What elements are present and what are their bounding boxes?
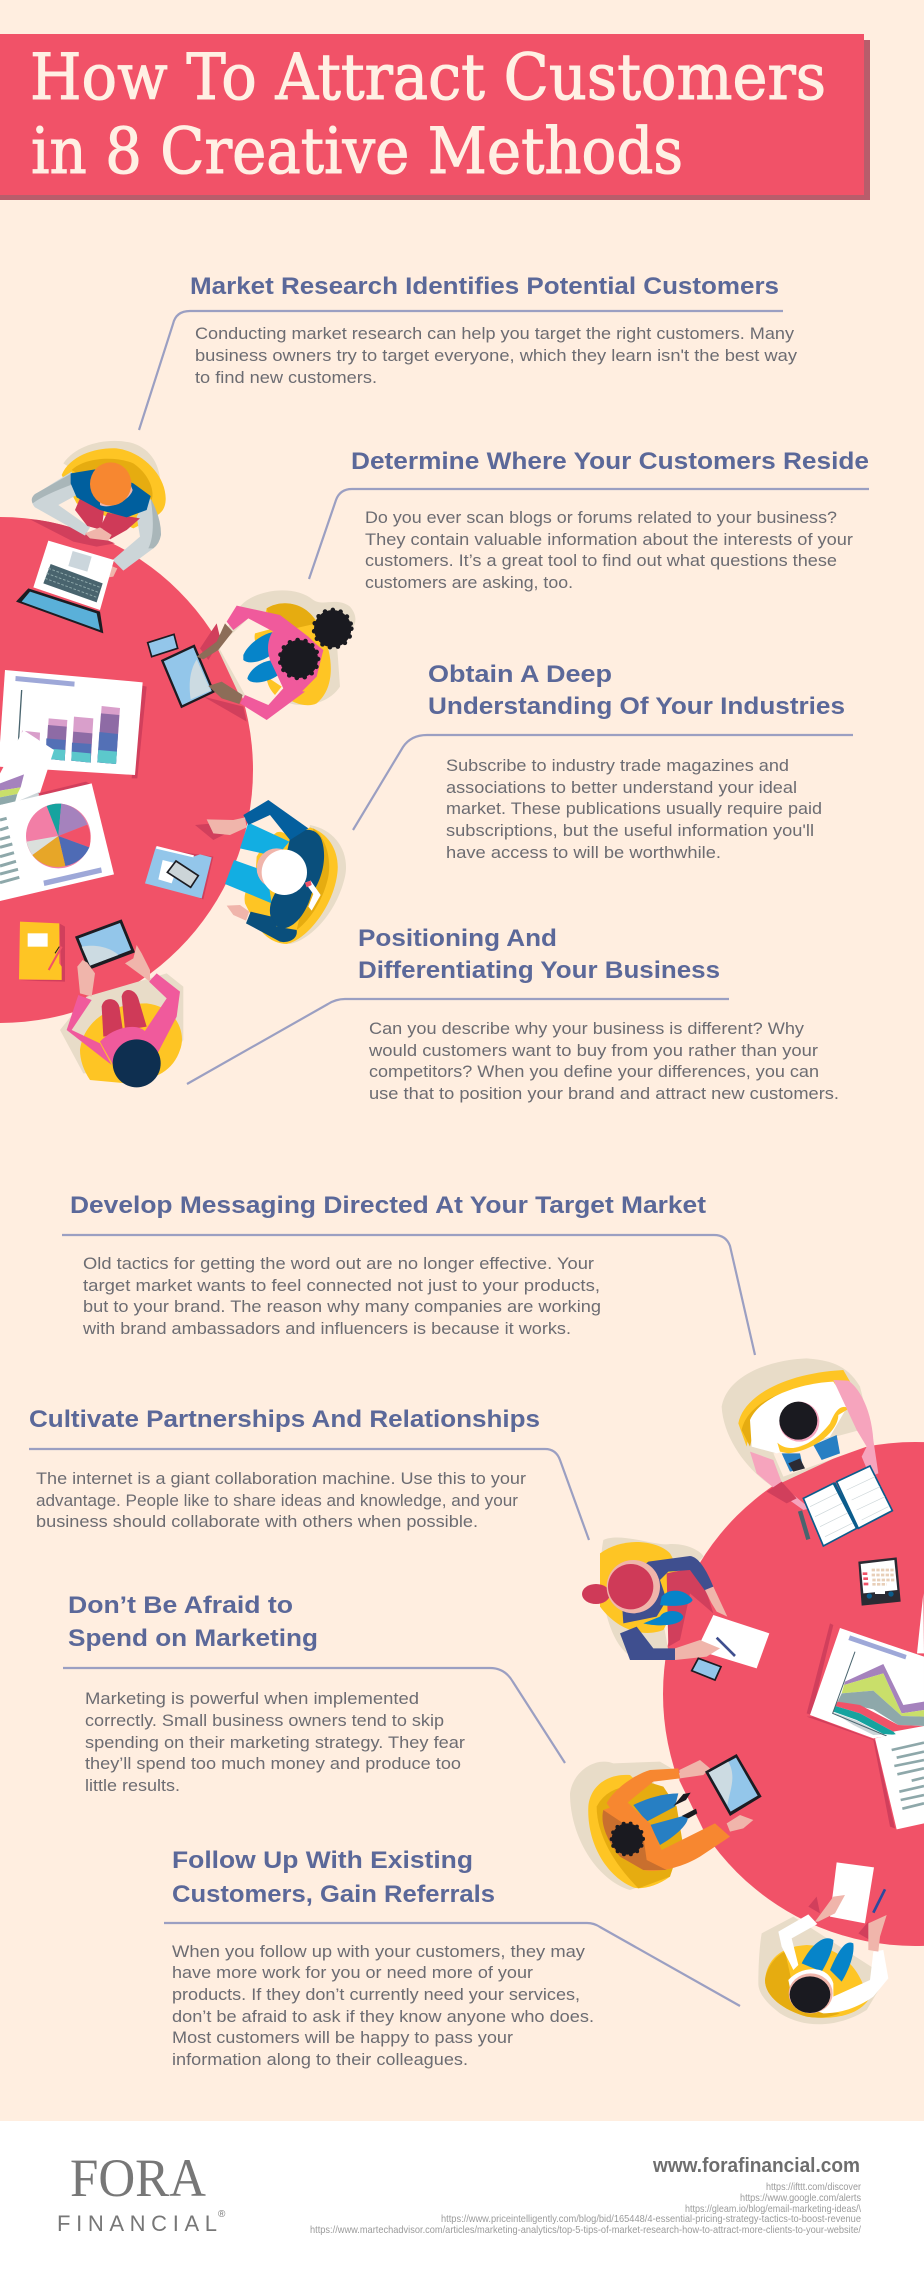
pie chart [26,804,91,868]
body text: would customers want to buy from you rather than your [368,1041,818,1060]
heading: Customers, Gain Referrals [172,1881,495,1908]
heading: Don’t Be Afraid to [68,1592,293,1619]
source links: https://www.priceintelligently.com/blog/bid/165448/4-essential-pricing-strategy-tactics-to-boost-revenue [441,2213,861,2225]
connector line [29,1449,589,1540]
table shadows [30,519,115,547]
body text: have more work for you or need more of your [172,1963,533,1982]
section 5: messaging [62,1192,755,1355]
right table illustration [570,1358,924,2024]
person at laptop [32,441,166,579]
source links: https://gleam.io/blog/email-marketing-ideas/\ [685,2203,861,2215]
body text: Old tactics for getting the word out are no longer effective. Your [83,1254,594,1273]
website: www.forafinancial.com [652,2155,860,2177]
person in white shirt [758,1895,888,2024]
body text: Do you ever scan blogs or forums related to your business? [365,508,837,527]
section 3: industries [353,661,853,862]
body text: business owners try to target everyone, which they learn isn't the best way [195,346,798,365]
left table illustration [0,441,355,1087]
body text: spending on their marketing strategy. They fear [85,1733,465,1752]
connector line [309,489,869,579]
section 1: market research [139,273,798,430]
body text: products. If they don’t currently need your services, [172,1985,580,2004]
calendar [858,1557,901,1606]
source links: https://ifttt.com/discover [766,2181,861,2193]
upper right people group [582,1358,901,1668]
lower right people group [570,1593,924,2024]
body text: customers. It’s a great tool to find out what questions these [365,551,837,570]
body text [85,1689,465,1795]
heading: Determine Where Your Customers Reside [351,448,869,475]
person in white with pink sleeves [722,1358,878,1510]
logo: FINANCIAL [57,2211,217,2236]
connector line [63,1668,565,1763]
logo [57,2148,226,2236]
body text: Can you describe why your business is different? Why [369,1019,805,1038]
body text [365,508,853,592]
pie chart sheet [0,782,114,901]
source links [310,2181,861,2236]
stacked area chart [833,1652,924,1736]
tablet [705,1754,762,1816]
connector line [62,1235,755,1355]
stacked area sheet [0,730,54,807]
section 8: follow up [164,1847,740,2069]
phone [692,1658,721,1680]
section 7: marketing spend [63,1592,565,1795]
person in pink with tablet [197,590,355,720]
bar chart sheet [0,670,147,778]
yellow notebook with pen [19,922,65,982]
body text: to find new customers. [195,368,377,387]
heading: Cultivate Partnerships And Relationships [29,1406,540,1433]
body text: target market wants to feel connected not just to your products, [83,1276,600,1295]
body text [82,1254,601,1338]
body text: The internet is a giant collaboration machine. Use this to your [36,1469,526,1488]
body text: have access to will be worthwhile. [446,843,721,862]
body text: Subscribe to industry trade magazines and [446,756,789,775]
body text: with brand ambassadors and influencers is because it works. [82,1319,571,1338]
body text: use that to position your brand and attract new customers. [369,1084,839,1103]
body text [172,1942,594,2069]
heading: Obtain A Deep [428,661,612,688]
body text: market. These publications usually require paid [446,799,822,818]
title banner: in 8 Creative Methods [31,115,683,189]
paper with pen [675,1615,769,1668]
heading: Positioning And [358,925,557,952]
heading: Differentiating Your Business [358,957,720,984]
connector line [353,735,853,830]
heading: Spend on Marketing [68,1625,318,1652]
open notebook [803,1466,892,1546]
lower left people group [0,730,346,1087]
body text: advantage. People like to share ideas and knowledge, and your [36,1491,518,1510]
body text [446,756,822,862]
body text: subscriptions, but the useful information you'll [446,821,814,840]
heading: Follow Up With Existing [172,1847,473,1874]
folder with phone [145,846,213,899]
heading: Market Research Identifies Potential Customers [190,273,779,300]
body text: information along to their colleagues. [172,2050,468,2069]
connector line [187,999,729,1084]
area chart sheet [807,1593,924,1828]
heading: Understanding Of Your Industries [428,693,845,720]
logo: FORA [70,2148,206,2208]
laptop [16,541,114,633]
person in pink with glasses [60,945,183,1087]
text document [875,1728,924,1829]
body text: business should collaborate with others when possible. [36,1512,478,1531]
connector line [139,311,783,430]
person in navy suit [195,800,346,944]
body text: Marketing is powerful when implemented [85,1689,419,1708]
body text: correctly. Small business owners tend to skip [85,1711,444,1730]
body text [368,1019,839,1103]
paper [830,1862,874,1923]
tablet [75,919,135,970]
body text: Conducting market research can help you target the right customers. Many [195,324,795,343]
heading: Develop Messaging Directed At Your Target Market [70,1192,706,1219]
footer [0,2121,924,2277]
body text [36,1469,526,1531]
pen [873,1889,885,1913]
phone [148,634,178,657]
heading [172,1847,495,1908]
title banner [0,34,870,200]
connector line [164,1923,740,2006]
logo: ® [218,2209,226,2220]
body text: little results. [85,1776,180,1795]
body text: customers are asking, too. [365,573,573,592]
title banner: How To Attract Customers [30,41,826,115]
source links: https://www.google.com/alerts [740,2192,861,2204]
section 4: positioning [187,925,839,1103]
body text: When you follow up with your customers, they may [172,1942,586,1961]
upper left people group [0,441,355,778]
body text: associations to better understand your ideal [446,778,797,797]
tablet [162,623,247,722]
body text: but to your brand. The reason why many companies are working [83,1297,601,1316]
heading [428,661,845,720]
body text [195,324,798,387]
section 6: partnerships [29,1406,589,1540]
body text: they’ll spend too much money and produce too [85,1754,461,1773]
body text: competitors? When you define your differences, you can [369,1062,819,1081]
pen [800,1511,808,1539]
section 2: customer location [309,448,869,592]
body text: don’t be afraid to ask if they know anyone who does. [172,2007,594,2026]
person in orange with tablet [570,1760,753,1890]
source links: https://www.martechadvisor.com/articles/marketing-analytics/top-5-tips-of-market-research-how-to-attract-more-clients-to-your-website/ [310,2224,861,2236]
body text: They contain valuable information about the interests of your [365,530,853,549]
heading [358,925,720,984]
body text: Most customers will be happy to pass your [172,2028,513,2047]
heading [68,1592,318,1652]
person in navy with red hair [582,1537,727,1660]
